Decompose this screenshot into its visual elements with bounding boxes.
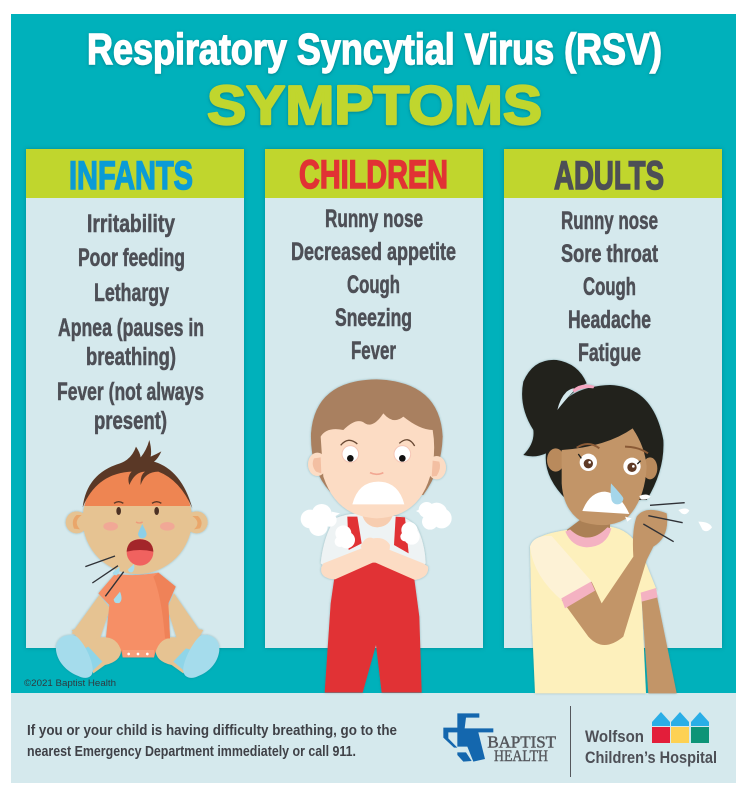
footer message: If you or your child is having difficulty breathing, go to the: [27, 722, 397, 739]
children symptom list: Sneezing: [335, 304, 412, 332]
adult symptom list: Sore throat: [561, 240, 658, 268]
infant symptom list: present): [94, 407, 167, 435]
adult symptom list: Fatigue: [578, 339, 641, 367]
shoes: [56, 635, 93, 678]
illustration: child: [301, 379, 452, 693]
logo: Wolfson Children's Hospital: [585, 712, 717, 767]
children symptom list: Runny nose: [325, 205, 423, 233]
panel: children: [265, 149, 483, 648]
infant symptom list: breathing): [86, 343, 176, 371]
arms: [72, 595, 110, 643]
neck and shirt: [321, 514, 426, 577]
arms and hands: [321, 547, 373, 579]
socks: [82, 647, 102, 673]
hair: [522, 360, 677, 693]
left leg: [72, 629, 121, 673]
head: [83, 465, 192, 574]
red overalls: [347, 517, 362, 550]
infant symptom list: Apnea (pauses in: [58, 314, 204, 342]
infant symptom list: Fever (not always: [57, 378, 204, 406]
infant symptom list: Irritability: [87, 210, 175, 238]
heading: symptoms: SYMPTOMS: [207, 74, 542, 136]
adult symptom list: [561, 207, 658, 367]
Health wordmark: HEALTH: [494, 748, 548, 765]
children symptom list: Decreased appetite: [291, 238, 456, 266]
face: [580, 454, 597, 471]
heading: infants: INFANTS: [69, 154, 193, 198]
hair back: [311, 379, 443, 495]
Baptist cross mark: [443, 713, 493, 762]
infant symptom list: [57, 210, 204, 435]
adult symptom list: Runny nose: [561, 207, 658, 235]
heading: children: CHILDREN: [299, 153, 448, 197]
ear detail: [313, 457, 321, 473]
fever forehead: [84, 472, 190, 506]
head: [321, 413, 434, 518]
logo: Baptist Health: [443, 713, 556, 762]
sneeze droplets: [625, 494, 712, 531]
right leg: [156, 629, 203, 673]
panel: adults: [504, 149, 722, 648]
children symptom list: Cough: [347, 271, 400, 299]
lower arm: [642, 595, 677, 693]
panel: infants: [26, 149, 244, 648]
illustration: adult: [522, 360, 712, 693]
collar and sleeves: [565, 527, 611, 547]
eyes: [342, 446, 359, 462]
nose drop: [138, 524, 147, 538]
footer band: [11, 693, 736, 783]
infant symptom list: Lethargy: [94, 279, 169, 307]
head: [562, 428, 647, 525]
cough lines: [643, 503, 685, 542]
nose drop: [611, 483, 623, 504]
cough lines: [85, 556, 124, 596]
mouth: [127, 539, 153, 566]
mask: [352, 482, 404, 504]
neck: [567, 520, 610, 540]
divider: [570, 706, 571, 777]
heading: adults: ADULTS: [554, 154, 664, 198]
infant symptom list: Poor feeding: [78, 244, 185, 272]
mask: [582, 492, 629, 514]
face: [114, 502, 123, 503]
children symptom list: [291, 205, 456, 365]
shirt: [530, 527, 657, 693]
breath clouds: [301, 502, 452, 548]
houses: [652, 712, 709, 743]
adult symptom list: Cough: [583, 273, 636, 301]
children symptom list: Fever: [351, 337, 396, 365]
onesie: [98, 573, 176, 657]
illustration: infant: [56, 440, 219, 678]
ears: [66, 511, 88, 533]
footer message: nearest Emergency Department immediately or call 911.: [27, 743, 356, 760]
adult symptom list: Headache: [568, 306, 651, 334]
raised arm: [562, 510, 667, 645]
copyright: ©2021 Baptist Health: [24, 678, 116, 688]
Baptist wordmark: BAPTIST: [487, 733, 556, 752]
ears: [308, 453, 327, 476]
wolfson wordmark: Wolfson: [585, 728, 644, 746]
footer message: [27, 722, 397, 760]
drool drops: [128, 564, 134, 572]
hair: [83, 440, 192, 508]
ears: [547, 448, 564, 472]
logo: Wolfson Children's Hospital: Children’s Hospital: [585, 749, 717, 767]
